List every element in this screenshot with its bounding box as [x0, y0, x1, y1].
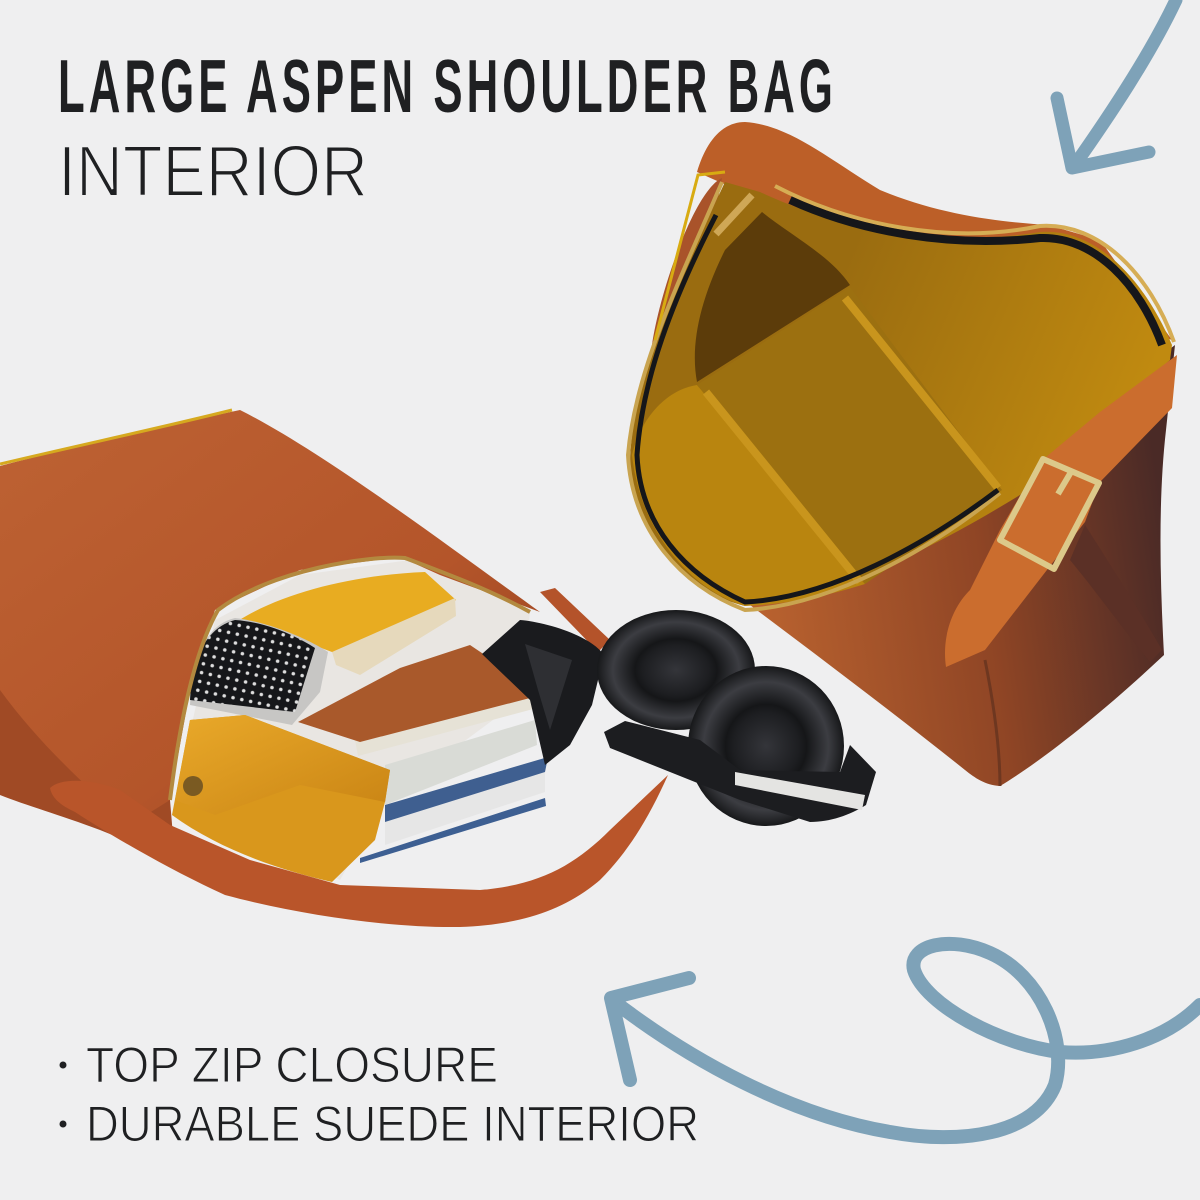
rivet [183, 776, 203, 796]
strap tab [540, 588, 610, 652]
interior floor [697, 287, 1002, 584]
bag: right, open showing suede interior [628, 122, 1177, 786]
zippers [628, 172, 1174, 610]
ear cushion front [688, 666, 844, 826]
interior compartment shade [695, 212, 850, 382]
headphones [482, 610, 876, 826]
hairbrush [190, 618, 328, 725]
title: INTERIOR [58, 132, 368, 212]
arrow: bottom curl [611, 944, 1200, 1137]
side fold [1070, 525, 1162, 662]
left hinge [482, 620, 604, 765]
bag outer leather [0, 410, 540, 825]
back panel and handle [697, 122, 1172, 340]
zipper [170, 558, 530, 800]
notebooks [360, 720, 548, 863]
feature list [60, 1037, 699, 1152]
yellow zip wallet [225, 572, 456, 675]
brown leather journal [298, 645, 537, 756]
bag: left, filled with accessories [0, 410, 668, 927]
feature list: DURABLE SUEDE INTERIOR [86, 1096, 699, 1152]
ear cushion back [597, 610, 755, 730]
title [58, 44, 837, 212]
left outer side [632, 178, 722, 440]
interior front wall [632, 385, 865, 606]
feature list: TOP ZIP CLOSURE [86, 1037, 498, 1093]
interior backing [175, 560, 530, 880]
strap [945, 355, 1177, 667]
bag exterior [730, 345, 1175, 786]
mustard pouch [172, 715, 390, 882]
bag lower layer [0, 680, 175, 860]
arrow: top right [1057, 0, 1176, 168]
interior seams [706, 298, 998, 582]
buckle [1000, 459, 1099, 569]
headband [604, 721, 876, 822]
strap [50, 775, 668, 927]
suede interior [630, 182, 1172, 606]
